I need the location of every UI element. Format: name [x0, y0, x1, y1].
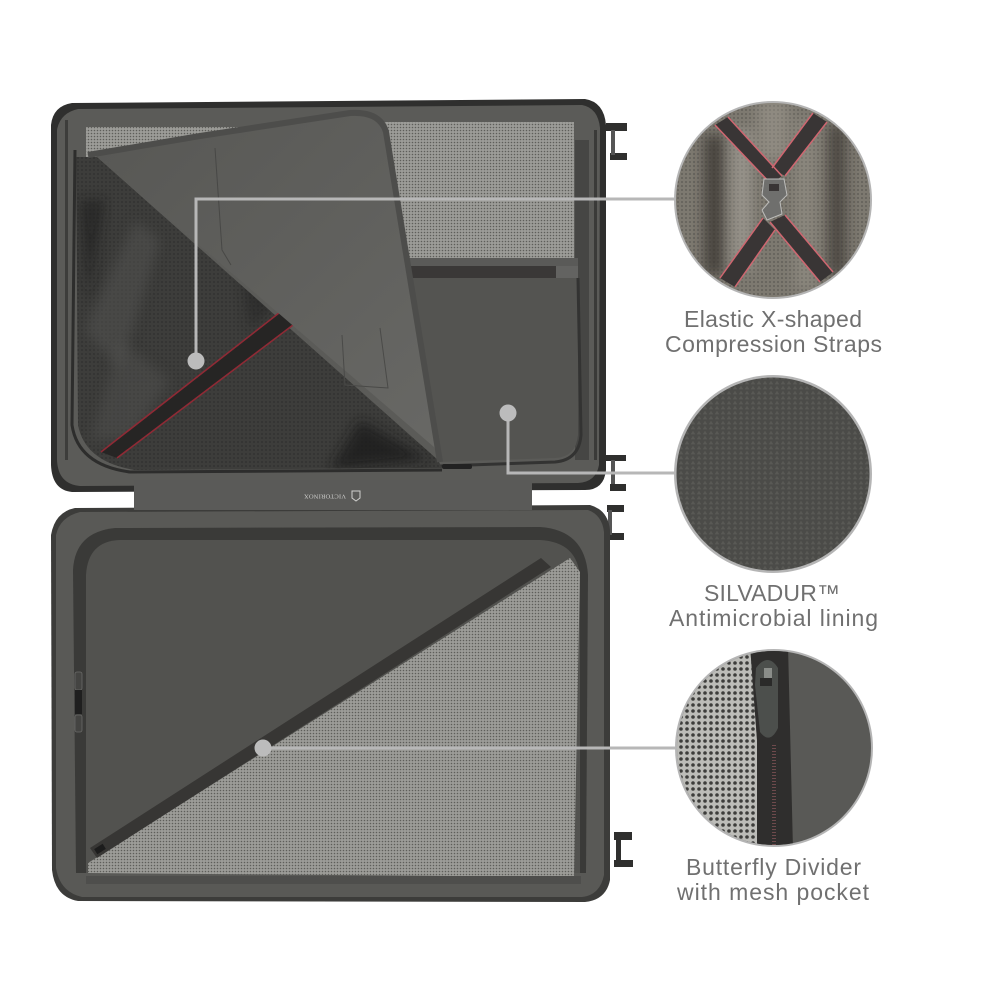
detail circle: straps: [670, 100, 880, 300]
logo shield: [352, 491, 360, 501]
callout: lining leader: [500, 404, 675, 473]
label: lining: Antimicrobial lining: [669, 605, 878, 631]
label: divider: Butterfly Divider: [686, 854, 861, 880]
outer shell: [51, 99, 606, 492]
top mesh strip: [86, 127, 256, 157]
detail circle: divider: [675, 649, 873, 847]
bottom suitcase shell: [51, 505, 610, 902]
detail circle: lining: [674, 375, 872, 573]
buckle: [762, 179, 787, 220]
red compression strap: [101, 313, 293, 458]
bottom wheels: [607, 505, 633, 867]
lid mesh interior: [76, 157, 442, 470]
mesh triangle: [88, 558, 580, 877]
callout: straps leader: [188, 199, 675, 370]
top wheels: [606, 123, 627, 491]
right mesh panel: [384, 122, 574, 260]
lower pocket: [409, 258, 581, 466]
label: lining: [669, 580, 878, 631]
zipper pull: [755, 660, 778, 738]
label: divider: with mesh pocket: [676, 879, 870, 905]
inner panel: [86, 540, 580, 873]
folded divider flap: [88, 113, 440, 462]
label: straps: Elastic X-shaped: [684, 306, 862, 332]
inner lining: [57, 105, 600, 486]
label: straps: Compression Straps: [665, 331, 882, 357]
top suitcase shell: [51, 99, 606, 492]
label: divider: [676, 854, 870, 905]
lock: [75, 672, 82, 732]
handle band with logo: [134, 480, 532, 510]
zipper surround: [73, 527, 588, 873]
zipper pull: [442, 464, 472, 469]
logo text: VICTORINOX: [304, 493, 346, 500]
callout: divider leader: [254, 740, 675, 756]
label: straps: [665, 306, 882, 357]
X strap: [715, 113, 833, 287]
diagonal zipper: [90, 558, 551, 858]
label: lining: SILVADUR™: [704, 580, 840, 606]
padded lining: [56, 510, 604, 897]
